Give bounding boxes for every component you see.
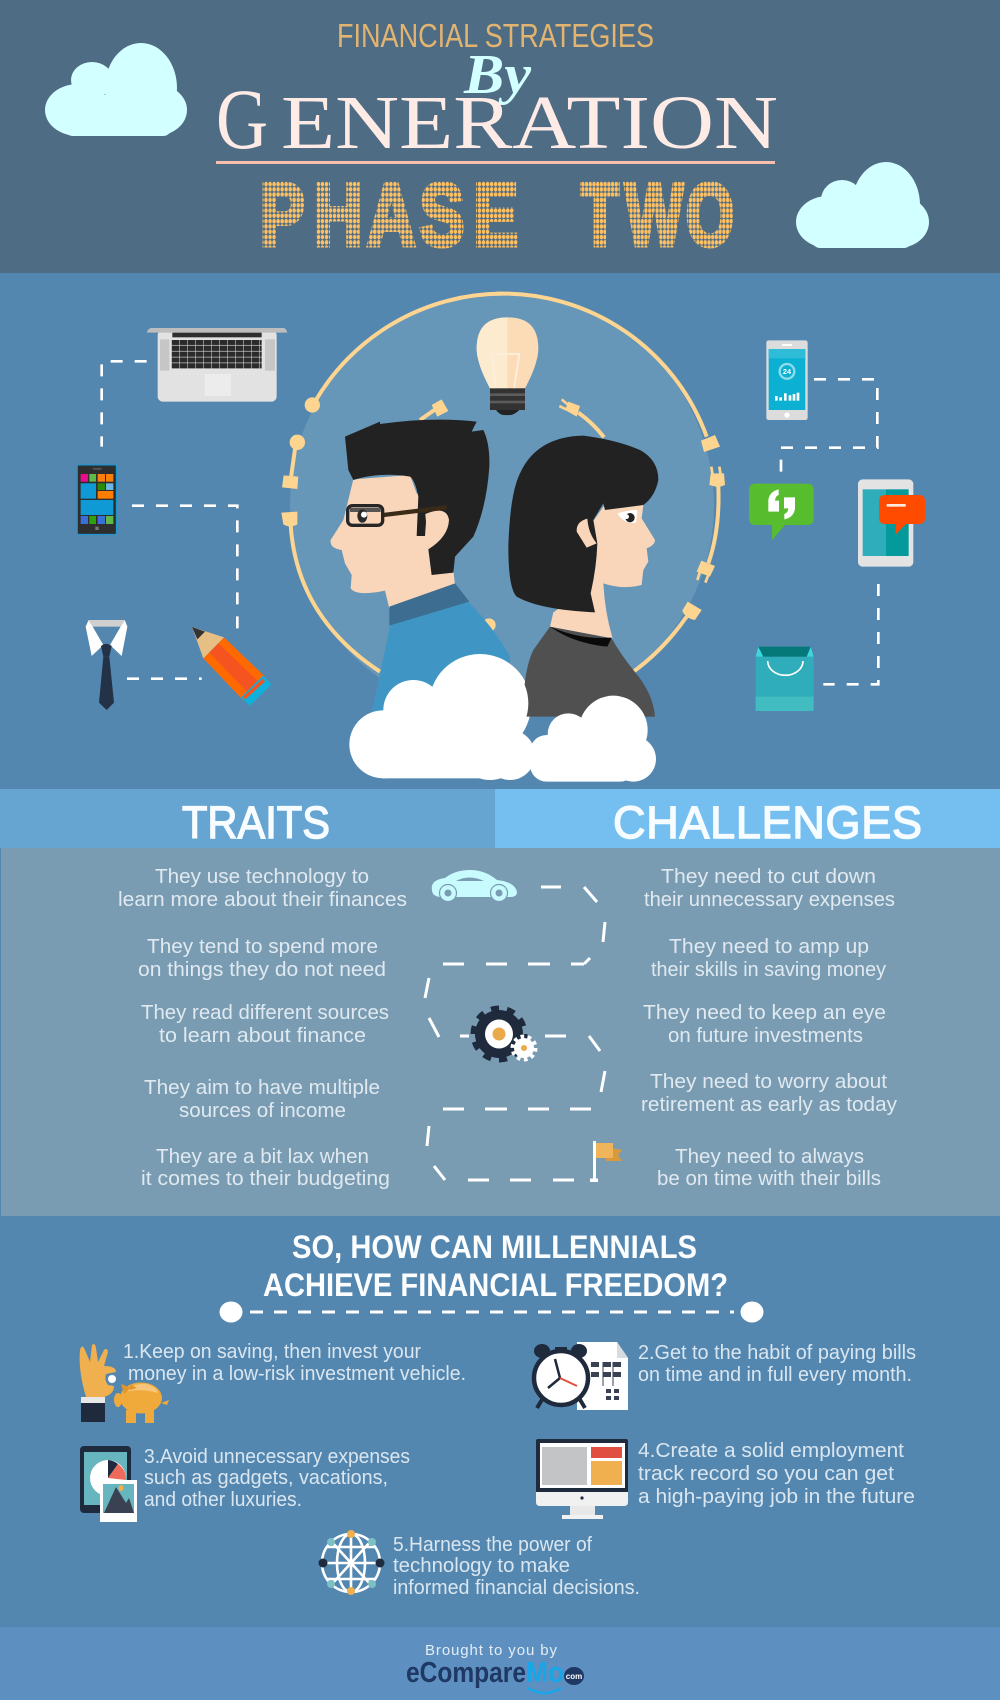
- dotted divider: [220, 1302, 764, 1322]
- dashed road: [425, 887, 605, 1180]
- panel: traits header: [0, 789, 495, 848]
- icon: laptop: [147, 328, 287, 402]
- title underline: [216, 161, 775, 164]
- icon: right header cloud: [796, 162, 929, 248]
- heading: how can millennials achieve financial freedom: [263, 1229, 728, 1303]
- dashed connectors left: [102, 361, 237, 679]
- icon: flag: [590, 1141, 622, 1182]
- text: tip 2: on time and in full every month.: [638, 1364, 912, 1386]
- large foreground cloud: [349, 654, 531, 778]
- text block: traits list: They are a bit lax when: [156, 1146, 369, 1168]
- tip 4: [536, 1439, 915, 1519]
- woman sweater: [523, 627, 655, 717]
- title line: generation remainder: ENERATION: [281, 81, 778, 165]
- text block: traits list: sources of income: [179, 1100, 346, 1122]
- icon: shopping bag: [756, 647, 814, 711]
- text block: traits list: They read different sources: [141, 1002, 389, 1024]
- icon: windows phone: [77, 465, 116, 534]
- title line: by: By: [463, 44, 532, 106]
- right side of illustration: [432, 294, 925, 782]
- text: tip 3: [144, 1446, 410, 1511]
- text block: traits list: on things they do not need: [138, 959, 386, 981]
- panel: challenges header: [495, 789, 1000, 848]
- title line: financial strategies: FINANCIAL STRATEGIES: [337, 17, 654, 54]
- icon: plug arcs left: [281, 294, 502, 672]
- title line: generation initial: G: [216, 71, 268, 167]
- text: tip 5: informed financial decisions.: [393, 1577, 640, 1599]
- text block: challenges list: [641, 866, 897, 1190]
- panel: footer: [0, 1627, 1000, 1700]
- text block: traits list: They use technology to: [155, 866, 369, 888]
- woman hair: [508, 436, 658, 612]
- man hair: [345, 420, 489, 575]
- tip 1: [80, 1341, 466, 1423]
- tip 5: [318, 1530, 640, 1599]
- icon: green speech bubble: [749, 484, 814, 540]
- heading: how can millennials achieve financial freedom: ACHIEVE FINANCIAL FREEDOM?: [263, 1267, 728, 1303]
- woman eye: [617, 510, 637, 523]
- panel: traits and challenges body: [1, 848, 1000, 1216]
- man collar: [389, 583, 469, 626]
- text block: challenges list: their unnecessary expenses: [644, 889, 895, 911]
- text block: challenges list: They need to keep an eye: [643, 1002, 886, 1024]
- text block: challenges list: They need to worry about: [650, 1071, 887, 1093]
- man figure: [331, 420, 510, 713]
- heading: challenges: CHALLENGES: [613, 797, 922, 848]
- woman neck and face: [550, 505, 655, 638]
- text: tip 3: 3.Avoid unnecessary expenses: [144, 1446, 410, 1468]
- text block: traits list: learn more about their finances: [118, 889, 407, 911]
- man neck and face: [331, 475, 455, 608]
- text: brought to you by: Brought to you by: [425, 1642, 558, 1659]
- text: tip 4: [638, 1440, 915, 1508]
- icon: clock and bill: [534, 1342, 628, 1410]
- illustration background: [0, 273, 1000, 789]
- text: tip 5: technology to make: [393, 1555, 570, 1577]
- logo: ecomparemo: Mo: [526, 1657, 564, 1689]
- text: tip 3: such as gadgets, vacations,: [144, 1467, 388, 1489]
- text block: traits list: it comes to their budgeting: [141, 1168, 390, 1190]
- dashed connectors right: [781, 379, 878, 684]
- icon: light bulb: [477, 317, 538, 415]
- logo: ecomparemo: com: [566, 1672, 582, 1681]
- left side of illustration: [77, 294, 531, 778]
- icon: smartphone with chart: 24: [783, 367, 792, 376]
- text block: traits list: They aim to have multiple: [144, 1077, 380, 1099]
- icon: plug arcs right: [497, 294, 725, 672]
- icon: hand and piggy bank: [80, 1344, 169, 1423]
- text: tip 5: [393, 1534, 640, 1599]
- man ear: [425, 511, 449, 549]
- circle backdrop: [290, 293, 714, 717]
- icon: globe network: [318, 1530, 384, 1595]
- text block: challenges list: They need to amp up: [669, 936, 869, 958]
- icon: pencil: [192, 627, 271, 706]
- text block: challenges list: on future investments: [668, 1025, 863, 1047]
- title line: phase two: PHASE: [260, 165, 518, 264]
- text: tip 1: [123, 1341, 466, 1385]
- text: tip 4: 4.Create a solid employment: [638, 1440, 904, 1462]
- heading: how can millennials achieve financial freedom: SO, HOW CAN MILLENNIALS: [292, 1229, 697, 1265]
- tip 3: [80, 1446, 410, 1522]
- icon: tablet with red bubble: [858, 479, 925, 567]
- text block: challenges list: be on time with their bills: [657, 1168, 881, 1190]
- woman figure: [508, 436, 658, 717]
- woman neckband: [550, 627, 612, 647]
- icon: gears: [474, 1008, 536, 1060]
- icon: left header cloud: [45, 43, 187, 136]
- text block: challenges list: retirement as early as today: [641, 1094, 897, 1116]
- text: tip 1: 1.Keep on saving, then invest your: [123, 1341, 421, 1363]
- text block: traits list: to learn about finance: [159, 1025, 366, 1047]
- icon: desktop monitor: [536, 1439, 628, 1519]
- text block: challenges list: their skills in saving money: [651, 959, 886, 981]
- heading: traits: TRAITS: [182, 797, 330, 848]
- text: tip 2: 2.Get to the habit of paying bills: [638, 1342, 916, 1364]
- icon: tablet and picture: [80, 1446, 137, 1522]
- icon: smartphone with chart: [766, 340, 808, 420]
- text: tip 4: a high-paying job in the future: [638, 1486, 915, 1508]
- man shirt: [372, 600, 510, 713]
- header background: [0, 0, 1000, 273]
- logo: ecomparemo: eCompare: [406, 1657, 526, 1689]
- woman ear: [577, 519, 597, 548]
- text block: challenges list: They need to cut down: [661, 866, 876, 888]
- text: tip 4: track record so you can get: [638, 1463, 894, 1485]
- text block: traits list: [118, 866, 407, 1190]
- title line: phase two: [260, 165, 734, 265]
- tip 2: [534, 1342, 916, 1410]
- title: [216, 17, 778, 265]
- text block: traits list: They tend to spend more: [147, 936, 378, 958]
- text: tip 2: [638, 1342, 916, 1386]
- text: tip 1: money in a low-risk investment vehicle.: [128, 1363, 466, 1385]
- icon: tie: [86, 620, 127, 710]
- text: tip 5: 5.Harness the power of: [393, 1534, 592, 1556]
- man glasses: [348, 506, 447, 525]
- text block: challenges list: They need to always: [675, 1146, 864, 1168]
- title line: phase two: TWO: [581, 166, 734, 265]
- icon: car: [432, 870, 517, 902]
- foreground cloud lobes: [432, 655, 656, 782]
- text: tip 3: and other luxuries.: [144, 1489, 302, 1511]
